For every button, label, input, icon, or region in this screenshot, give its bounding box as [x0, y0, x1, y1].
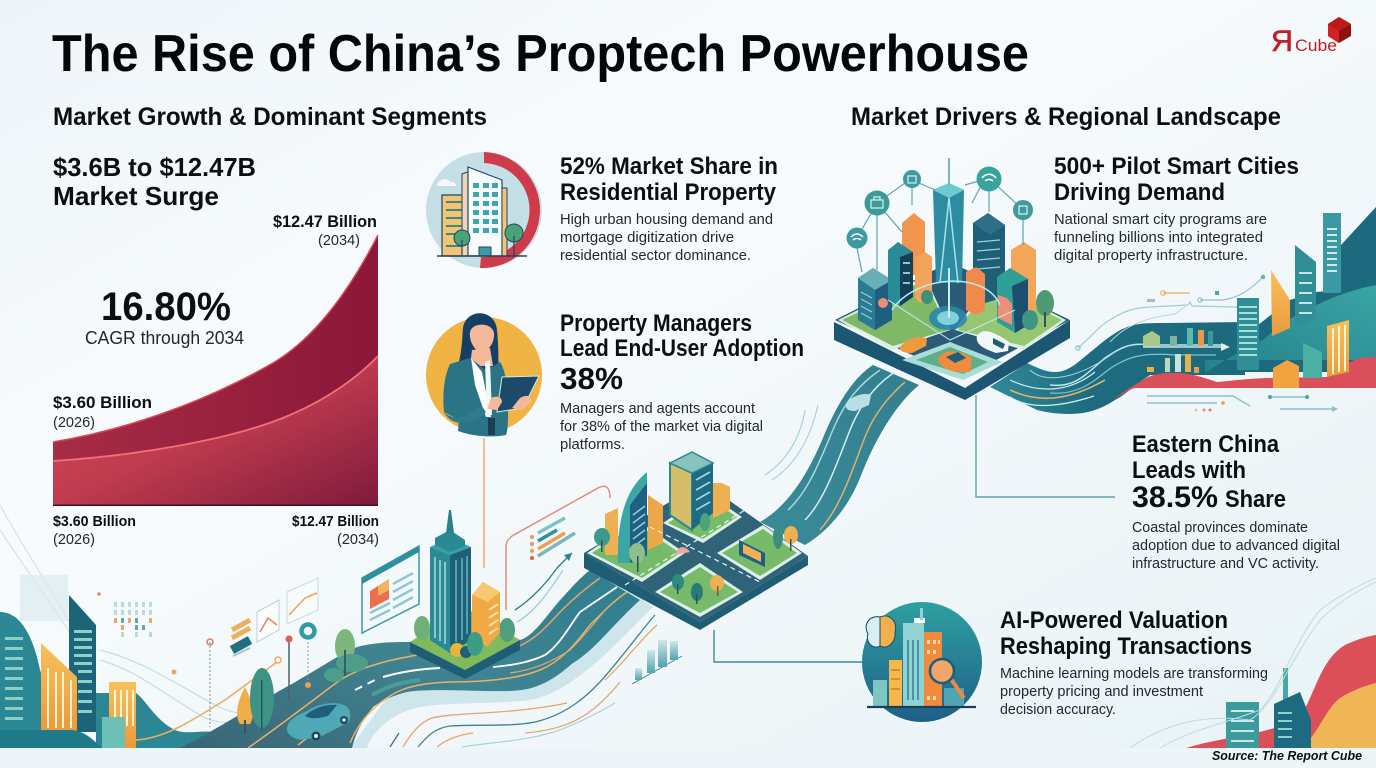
decorative bottom band	[0, 748, 1376, 768]
text block: eastern china: Eastern China	[1132, 431, 1280, 458]
text block: AI valuation: property pricing and investment	[1000, 683, 1204, 700]
text block: property managers: Managers and agents account	[560, 400, 756, 417]
text block: property managers: for 38% of the market via digital	[560, 418, 763, 435]
small bar chart by road	[632, 640, 682, 684]
panel: market surge chart: $12.47 Billion	[273, 213, 377, 231]
text block: smart cities	[1054, 153, 1299, 264]
text block: AI valuation: decision accuracy.	[1000, 701, 1116, 718]
text block: AI valuation	[1000, 607, 1268, 718]
road: middle rising section	[760, 365, 919, 545]
text block: eastern china: 38.5%	[1132, 481, 1218, 514]
heading: left section: Market Growth & Dominant Segments	[53, 103, 487, 131]
trees and roadside plants	[237, 629, 368, 734]
text block: AI valuation: AI-Powered Valuation	[1000, 607, 1228, 634]
text block: AI valuation: Reshaping Transactions	[1000, 633, 1252, 660]
panel: market surge chart: (2034)	[337, 531, 379, 548]
smart city network icons	[846, 166, 1033, 272]
illustration: smart city isometric hub	[834, 158, 1070, 400]
panel: market surge chart: $3.60 Billion	[53, 513, 136, 530]
text block: eastern china: Share	[1225, 486, 1286, 513]
panel: market surge chart: $3.60 Billion	[53, 394, 152, 412]
text block: property managers	[560, 310, 804, 453]
text block: property managers: Lead End-User Adoption	[560, 335, 804, 362]
text block: smart cities: funneling billions into integrated	[1054, 229, 1263, 246]
text block: residential share: residential sector dominance.	[560, 247, 751, 264]
logo	[1271, 17, 1351, 58]
text block: eastern china	[1132, 431, 1340, 572]
text block: residential share: High urban housing demand and	[560, 211, 773, 228]
text block: eastern china: adoption due to advanced digital	[1132, 537, 1340, 554]
floating data graphics left	[97, 578, 318, 740]
car on road	[287, 703, 350, 740]
text block: residential share: 52% Market Share in	[560, 153, 778, 180]
text block: eastern china: Coastal provinces dominate	[1132, 519, 1308, 536]
panel: market surge chart: CAGR through 2034	[85, 328, 244, 348]
connector lines	[484, 395, 1115, 662]
text block: residential share: mortgage digitization drive	[560, 229, 734, 246]
panel: market surge chart: $3.6B to $12.47B	[53, 152, 256, 182]
panel: market surge chart: Market Surge	[53, 181, 219, 211]
text block: residential share	[560, 153, 778, 264]
illustration: second isometric hub	[584, 452, 808, 630]
text block: property managers: 38%	[560, 361, 623, 396]
icon: property manager	[426, 313, 542, 436]
logo: Cube	[1295, 36, 1337, 55]
heading: right section: Market Drivers & Regional Landscape	[851, 103, 1281, 131]
source note: Source: The Report Cube	[1212, 748, 1362, 763]
road: right flow toward skyline	[990, 207, 1376, 414]
illustration: right skyline	[1143, 213, 1349, 412]
icon: AI valuation	[862, 602, 982, 722]
text block: smart cities: Driving Demand	[1054, 179, 1225, 206]
text block: eastern china: Leads with	[1132, 457, 1246, 484]
panel: market surge chart: (2026)	[53, 531, 95, 548]
text block: property managers: Property Managers	[560, 310, 752, 337]
title: The Rise of China’s Proptech Powerhouse	[52, 25, 1029, 83]
list icon and arrow by hub	[515, 518, 575, 622]
text block: smart cities: 500+ Pilot Smart Cities	[1054, 153, 1299, 180]
road: lower left section	[180, 570, 657, 748]
illustration: first isometric hub	[410, 510, 520, 679]
logo: Я	[1271, 25, 1293, 58]
panel: market surge chart: $12.47 Billion	[292, 513, 379, 530]
text block: property managers: platforms.	[560, 436, 625, 453]
panel: market surge chart	[53, 152, 379, 548]
text block: smart cities: digital property infrastructure.	[1054, 247, 1248, 264]
text block: eastern china: infrastructure and VC activity.	[1132, 555, 1319, 572]
text block: residential share: Residential Property	[560, 179, 777, 206]
panel: market surge chart: (2034)	[318, 232, 360, 249]
illustration: left city skyline	[0, 505, 280, 748]
text block: smart cities: National smart city programs are	[1054, 211, 1267, 228]
panel: market surge chart: 16.80%	[101, 285, 231, 329]
text block: AI valuation: Machine learning models are transforming	[1000, 665, 1268, 682]
icon: residential building donut	[426, 152, 542, 268]
illustration: bottom right waves and buildings	[1130, 578, 1376, 748]
illustration: browser panel	[362, 546, 419, 633]
panel: market surge chart: (2026)	[53, 414, 95, 431]
